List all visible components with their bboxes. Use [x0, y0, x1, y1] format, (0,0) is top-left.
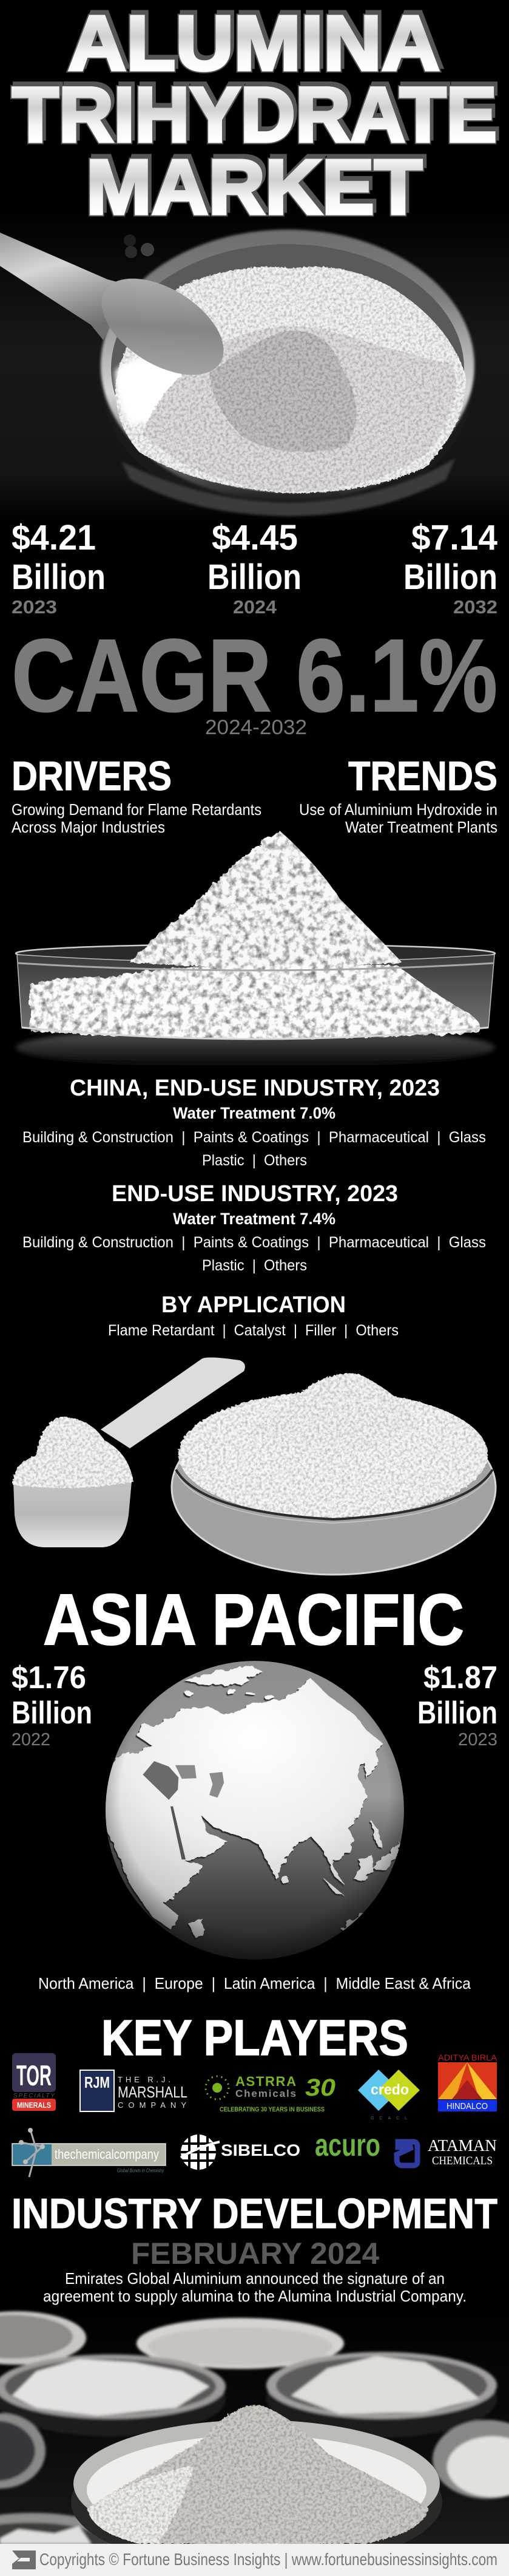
photo: powder in round glass dish	[172, 1374, 496, 1575]
global end-use industry section: Water Treatment 7.4%	[173, 1210, 335, 1228]
title line: MARKET: MARKET	[89, 140, 425, 227]
global end-use industry section: END-USE INDUSTRY, 2023	[112, 1181, 398, 1207]
stat: Asia Pacific 2022: Billion	[12, 1695, 92, 1731]
globe	[97, 1661, 404, 1960]
Asia Pacific heading: ASIA PACIFIC	[43, 1579, 464, 1660]
logo: Acuro: acuro	[315, 2128, 380, 2163]
logo: The Chemical Company: Global Bonds in Chemistry	[117, 2168, 164, 2173]
stat: 2032 market size	[403, 518, 497, 618]
logo: Ataman Chemicals	[397, 2136, 497, 2167]
by application section: Flame Retardant | Catalyst | Filler | Others	[108, 1322, 399, 1339]
development description	[43, 2269, 467, 2305]
logo: Astrra Chemicals: CELEBRATING 30 YEARS IN BUSINESS	[220, 2106, 325, 2113]
development description: Emirates Global Aluminium announced the signature of an	[65, 2269, 445, 2288]
title	[12, 0, 499, 231]
key players heading: KEY PLAYERS	[101, 2009, 408, 2066]
stat: Asia Pacific 2022	[12, 1660, 92, 1750]
China end-use industry section: Water Treatment 7.0%	[173, 1104, 335, 1122]
stat: 2024 market size: Billion	[207, 557, 302, 597]
stat: 2024 market size	[207, 518, 302, 618]
title line: TRIHYDRATE: TRIHYDRATE	[12, 72, 497, 158]
logo: Ataman Chemicals: CHEMICALS	[432, 2155, 493, 2167]
title line: MARKET: MARKET	[86, 144, 422, 231]
development date: FEBRUARY 2024	[131, 2237, 379, 2271]
development description: agreement to supply alumina to the Alumina Industrial Company.	[43, 2287, 467, 2305]
logo: TOR Specialty Minerals	[12, 2053, 56, 2111]
logo: The Chemical Company	[12, 2128, 166, 2177]
stat: Asia Pacific 2023	[417, 1660, 497, 1750]
title line: TRIHYDRATE: TRIHYDRATE	[12, 72, 497, 158]
icon: Fortune Business Insights logo	[12, 2550, 36, 2569]
logo: The Chemical Company: thechemicalcompany	[55, 2147, 159, 2162]
other regions list: North America | Europe | Latin America | Middle East & Africa	[38, 1974, 471, 1992]
logo: Sibelco	[181, 2135, 300, 2170]
logo: Aditya Birla Hindalco	[438, 2053, 497, 2111]
stat: 2032 market size: 2032	[453, 596, 497, 618]
stat: 2024 market size: $4.45	[212, 518, 298, 557]
logo: Aditya Birla Hindalco: ADITYA BIRLA	[438, 2053, 497, 2062]
CAGR period: 2024-2032	[205, 716, 307, 739]
logo: Astrra Chemicals	[206, 2074, 335, 2113]
logo: The R.J. Marshall Company: THE R.J.	[118, 2075, 170, 2084]
stat: Asia Pacific 2023: 2023	[458, 1730, 497, 1750]
logo: Astrra Chemicals: ASTRRA	[235, 2074, 296, 2089]
logo: Astrra Chemicals: 30	[305, 2074, 335, 2101]
global end-use industry section: Building & Construction | Paints & Coatings | Pharmaceutical | Glass	[22, 1234, 486, 1251]
logo: Credo	[358, 2070, 420, 2121]
stat: 2023 market size	[12, 518, 106, 618]
stat: 2032 market size: Billion	[403, 557, 497, 597]
drivers block: Growing Demand for Flame Retardants	[12, 800, 261, 819]
drivers block: Across Major Industries	[12, 818, 165, 836]
drivers block: DRIVERS	[12, 753, 172, 799]
trends block: Water Treatment Plants	[345, 818, 497, 836]
stat: 2023 market size: $4.21	[12, 518, 96, 557]
logo: The R.J. Marshall Company	[80, 2070, 187, 2111]
by application section	[108, 1292, 399, 1339]
China end-use industry section	[22, 1075, 486, 1169]
logo: Aditya Birla Hindalco: HINDALCO	[447, 2101, 488, 2111]
photo: powder pile in glass dish	[16, 830, 495, 1068]
by application section: BY APPLICATION	[161, 1292, 346, 1318]
title line: MARKET: MARKET	[86, 144, 422, 231]
logo: Ataman Chemicals: ATAMAN	[428, 2136, 497, 2155]
stat: 2032 market size: $7.14	[411, 518, 497, 557]
logo: Sibelco: SIBELCO	[221, 2141, 300, 2159]
logo: Astrra Chemicals: Chemicals	[235, 2088, 296, 2099]
stat: Asia Pacific 2022: 2022	[12, 1730, 50, 1750]
title line: TRIHYDRATE: TRIHYDRATE	[15, 68, 499, 155]
logo: Credo: GCACL	[371, 2116, 407, 2121]
logo: The R.J. Marshall Company: RJM	[84, 2073, 110, 2091]
drivers block	[12, 753, 261, 836]
footer bar	[0, 2544, 509, 2576]
China end-use industry section: Plastic | Others	[202, 1152, 307, 1169]
photo: scoop of powder	[13, 1357, 245, 1547]
photo: bowls of alumina powder	[0, 2309, 509, 2544]
logo: TOR Specialty Minerals: MINERALS	[17, 2101, 51, 2110]
logo: The R.J. Marshall Company: MARSHALL	[118, 2083, 187, 2101]
logo: TOR Specialty Minerals: TOR	[16, 2059, 52, 2091]
trends block: Use of Aluminium Hydroxide in	[299, 800, 497, 819]
title line: ALUMINA: ALUMINA	[68, 0, 440, 87]
logo: TOR Specialty Minerals: SPECIALTY	[13, 2093, 55, 2099]
stat: 2023 market size: 2023	[12, 596, 57, 618]
logo: Credo: credo	[371, 2082, 409, 2098]
logo: The R.J. Marshall Company: COMPANY	[118, 2101, 186, 2110]
China end-use industry section: CHINA, END-USE INDUSTRY, 2023	[70, 1075, 440, 1101]
stat: 2024 market size: 2024	[233, 596, 277, 618]
trends block	[299, 753, 497, 836]
hero photo: spoon and powder dish	[0, 206, 509, 522]
global end-use industry section: Plastic | Others	[202, 1257, 307, 1274]
global end-use industry section	[22, 1181, 486, 1274]
stat: Asia Pacific 2022: $1.76	[12, 1660, 86, 1695]
stat: 2023 market size: Billion	[12, 557, 106, 597]
stat: Asia Pacific 2023: $1.87	[423, 1660, 497, 1695]
China end-use industry section: Building & Construction | Paints & Coatings | Pharmaceutical | Glass	[22, 1129, 486, 1146]
title line: ALUMINA: ALUMINA	[68, 0, 440, 87]
